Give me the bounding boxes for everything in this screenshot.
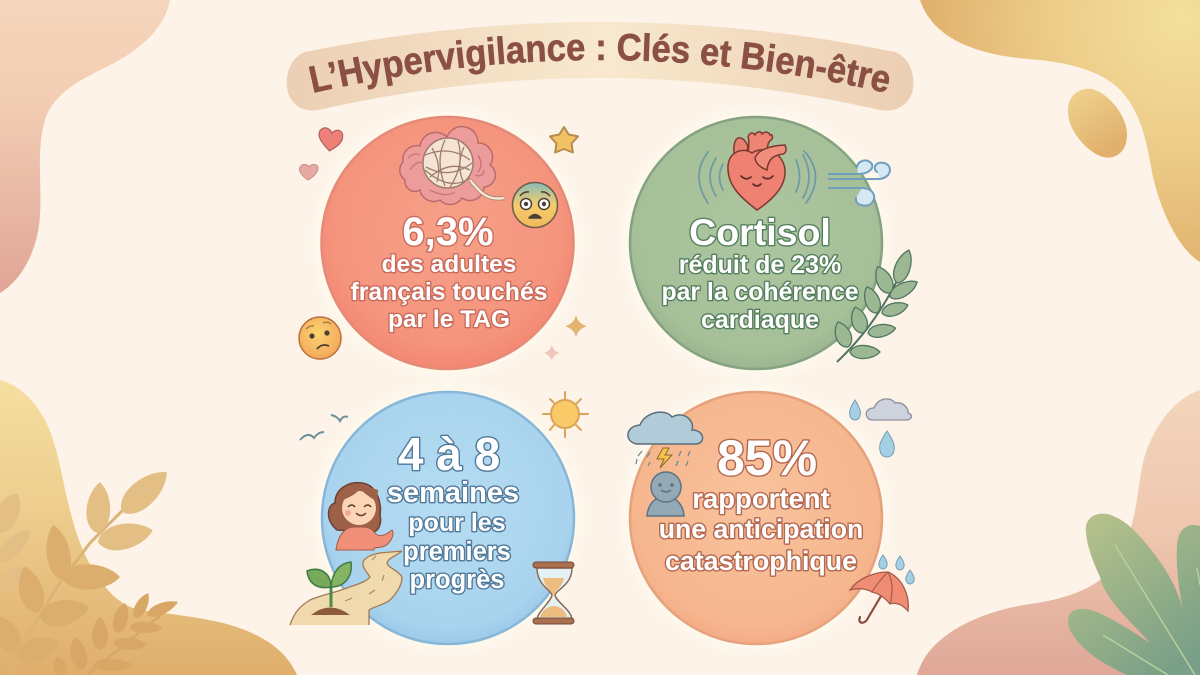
stat text: pour les (408, 509, 506, 537)
stat text: 85% (717, 430, 817, 486)
icon: storm cloud (628, 412, 703, 468)
icon: small cloud (866, 399, 912, 420)
blob: bottom left (0, 380, 297, 675)
panel: cortisol (613, 100, 920, 386)
title: L’Hypervigilance : Clés et Bien-être (308, 32, 890, 93)
icon: wind (829, 160, 890, 206)
icon: confused face (299, 317, 341, 359)
stat text: français touchés (350, 279, 548, 306)
panel: 4 to 8 weeks (290, 375, 591, 661)
stat text: rapportent (692, 483, 830, 514)
stat text (387, 428, 519, 594)
icon: worried face (512, 182, 558, 228)
icon: heart (317, 127, 344, 152)
foliage: bottom left (0, 462, 180, 675)
panel: 85 percent (613, 375, 914, 661)
blob: bottom right (917, 390, 1200, 675)
stat text: cardiaque (701, 306, 819, 334)
icon: sprout (307, 562, 351, 615)
icon: hourglass (533, 562, 574, 624)
stat text: progrès (410, 566, 504, 594)
stat text: par la cohérence (661, 279, 859, 306)
stat text: des adultes (382, 251, 516, 278)
stat text: réduit de 23% (679, 251, 841, 279)
stat text: catastrophique (665, 546, 857, 576)
icon: leaf branch (831, 248, 920, 362)
stat text (659, 430, 863, 576)
stat text: 4 à 8 (398, 428, 500, 480)
stat text (661, 211, 859, 334)
icon: calm heart with pulse waves (699, 132, 816, 210)
icon: pink sparkle (544, 345, 560, 361)
stat text: une anticipation (659, 514, 863, 544)
icon: winding path (290, 551, 402, 625)
icon: gold sparkle (565, 315, 587, 337)
stat text: premiers (403, 538, 511, 566)
title banner (286, 22, 914, 111)
icon: umbrella with rain (850, 555, 914, 623)
icon: birds (300, 415, 348, 440)
stat text: semaines (387, 477, 519, 509)
blob: small gold pebble (1068, 89, 1127, 158)
stat text: 6,3% (402, 210, 494, 254)
blob: top right (920, 0, 1200, 262)
panel: 6,3% adults (299, 100, 590, 386)
icon: pale heart (299, 164, 318, 180)
icon: sun (543, 392, 588, 437)
icon: worried figure (647, 472, 684, 516)
icon: tangled brain (400, 127, 504, 204)
icon: smiling girl (328, 483, 393, 550)
foliage: bottom right (1068, 514, 1200, 675)
stat text: par le TAG (388, 306, 510, 333)
icon: star (550, 127, 578, 152)
icon: large water drop (880, 431, 894, 457)
icon: water drop (850, 400, 860, 420)
stat text (350, 210, 548, 333)
stat text: Cortisol (689, 211, 831, 253)
blob: top left (0, 0, 170, 293)
